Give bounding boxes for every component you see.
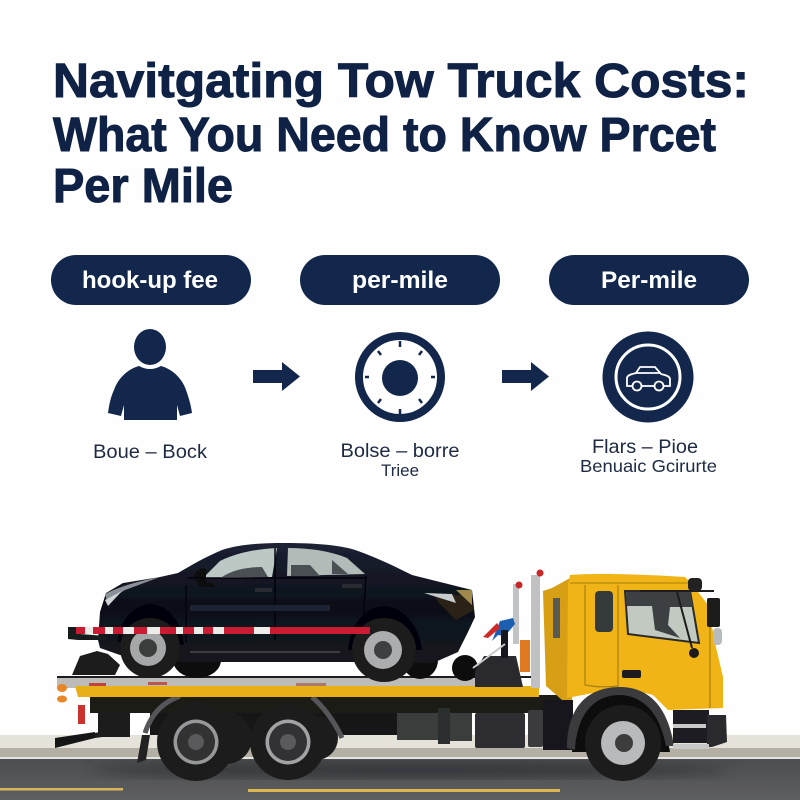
pill: hook-up fee: [51, 255, 251, 305]
car front window: [203, 548, 277, 578]
rear posts: [513, 570, 544, 688]
side mirror: [707, 598, 722, 645]
label: step one: Boue – Bock: [93, 441, 207, 463]
truck cab: [567, 574, 723, 710]
car hood highlight: [105, 577, 160, 601]
cab small window: [595, 591, 613, 632]
cab bumper and steps: [673, 715, 727, 749]
car wheels: [120, 618, 416, 682]
pill: per-mile: per-mile: [352, 267, 448, 294]
car wheel arches: [118, 604, 422, 650]
label: step three: Benuaic Gcirurte: [580, 456, 717, 476]
title: [53, 55, 749, 213]
cab wheel well: [572, 692, 670, 752]
cab rear panel: [543, 577, 572, 700]
title: Navitgating Tow Truck Costs:: [53, 55, 749, 108]
car body: [98, 543, 475, 663]
icon: car in circle: [602, 332, 694, 422]
rear truck wheels: [157, 703, 338, 781]
wiper mount: [689, 648, 699, 658]
pill: Per-mile: [549, 255, 749, 305]
pill: hook-up fee: hook-up fee: [82, 267, 218, 294]
cab main window: [625, 591, 699, 643]
icon: dial: [359, 336, 441, 418]
car side mirror: [193, 568, 216, 587]
icon: person: [108, 329, 192, 420]
cab door seams: [585, 585, 710, 708]
car door lines and handles: [186, 548, 366, 652]
cab sun visor: [688, 578, 702, 591]
label: step three: Flars – Pioe: [592, 436, 698, 458]
windshield wiper: [640, 591, 714, 648]
black wheel chock: [72, 651, 120, 675]
rear fenders: [145, 696, 342, 738]
pill: per-mile: [300, 255, 500, 305]
street background: [0, 735, 800, 800]
arrow: step one to two: [253, 362, 300, 391]
car lights: [105, 591, 122, 606]
label: step two: Triee: [381, 461, 419, 480]
red and white strap: [68, 627, 370, 640]
tow truck with car: [55, 543, 727, 781]
arrow: step two to three: [502, 362, 549, 391]
label: step three: [580, 436, 717, 476]
cab roof line: [570, 582, 692, 584]
title: Per Mile: [53, 160, 233, 213]
cab side window: [553, 598, 560, 638]
cab wheel arch: [567, 687, 674, 750]
pill: Per-mile: Per-mile: [601, 267, 697, 294]
door handle: [622, 670, 641, 678]
label: step two: [340, 440, 460, 480]
label: step two: Bolse – borre: [340, 440, 460, 462]
car rear window: [287, 548, 365, 576]
front truck wheel: [585, 705, 661, 781]
truck chassis: [55, 695, 573, 763]
flatbed deck: [57, 676, 539, 724]
hidden car wheels: [173, 641, 478, 681]
title: What You Need to Know Prcet: [53, 109, 716, 162]
car interior shadows: [222, 560, 348, 577]
rear control gear: [473, 618, 530, 687]
